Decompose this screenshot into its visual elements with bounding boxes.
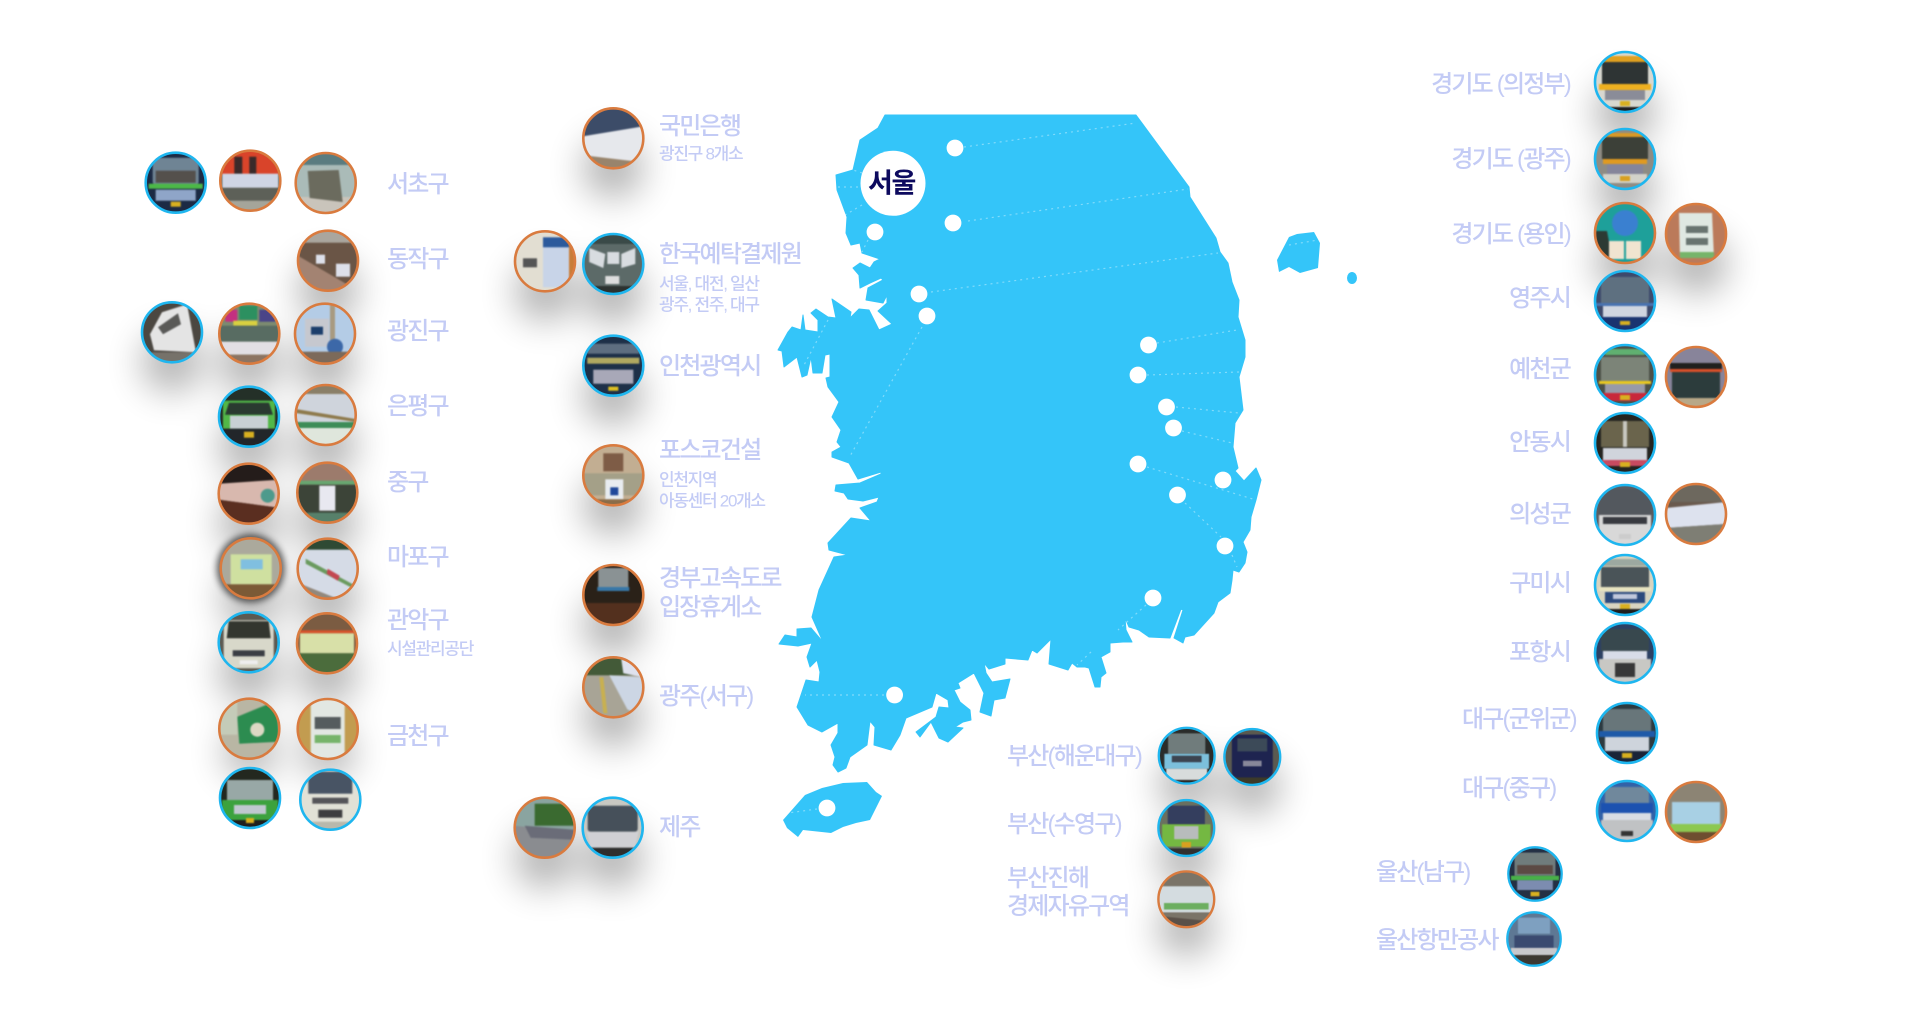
photo: 해운대구 navy truck: [1224, 729, 1280, 785]
photo: 의성 fence panels: [1666, 484, 1726, 544]
photo: white truck: [300, 770, 360, 830]
photo: 중구 shelter: [297, 463, 357, 523]
label: 서울, 대전, 일산: 서울, 대전, 일산: [659, 274, 760, 294]
label: 의성군: 의성군: [1509, 501, 1571, 528]
label: 동작구: 동작구: [387, 246, 449, 273]
label: 부산(수영구): 부산(수영구): [1007, 811, 1122, 838]
photo: green bus: [220, 768, 280, 828]
photo: 안동 bus: [1595, 413, 1655, 473]
island: Jeju: [783, 782, 882, 837]
label: 관악구: 관악구: [387, 607, 449, 634]
label: 중구: 중구: [387, 469, 428, 496]
label: 인천광역시: 인천광역시: [659, 353, 760, 380]
panel: Busan: [1007, 728, 1280, 927]
photo: 제주 roadside: [515, 798, 575, 858]
photo: 대구 중구 blue truck: [1597, 781, 1657, 841]
photo: 금천구 green wall: [219, 699, 279, 759]
photo: 구미 bus: [1595, 555, 1655, 615]
photo: 한국예탁결제원 bus: [583, 234, 643, 294]
photo: 마포구 banner: [298, 539, 358, 599]
photo: 서초구 cabinet: [296, 153, 356, 213]
photo: 포스코건설 display: [583, 445, 643, 505]
photo: 중구 night banner: [219, 464, 279, 524]
photo: 대구 중구 banner: [1666, 782, 1726, 842]
label: 금천구: 금천구: [387, 723, 449, 750]
label: 경기도 (의정부): 경기도 (의정부): [1431, 71, 1571, 98]
label: 울산항만공사: 울산항만공사: [1376, 927, 1499, 954]
label: 은평구: 은평구: [387, 393, 449, 420]
label: 부산진해: 부산진해: [1007, 865, 1088, 892]
label: 입장휴게소: 입장휴게소: [659, 594, 761, 621]
photo: 예천 red bus: [1595, 345, 1655, 405]
photo: 군위 blue bus: [1597, 703, 1657, 763]
Seoul marker: 서울: [868, 168, 915, 198]
photo: 은평구 fence banner: [296, 385, 356, 445]
photo: 광진구 white truck: [142, 302, 202, 362]
photo: 국민은행: [583, 108, 643, 168]
label: 인천지역: 인천지역: [659, 470, 716, 490]
panel: organisations and regions: [515, 108, 801, 858]
photo: 관악구 banner: [297, 613, 357, 673]
label: 광진구 8개소: 광진구 8개소: [659, 144, 743, 164]
photo: 수영구 green truck: [1158, 800, 1214, 856]
photo: 예천 bus shelter: [1666, 347, 1726, 407]
label: 경부고속도로: 경부고속도로: [659, 565, 781, 592]
photo: 의성 grey bus: [1595, 485, 1655, 545]
label: 광진구: 광진구: [387, 318, 449, 345]
island: Dokdo: [1347, 272, 1357, 284]
photo: 울산 남구 green bus: [1508, 847, 1562, 901]
map of South Korea: [778, 115, 1357, 837]
photo: 부산진해 banner: [1158, 871, 1214, 927]
photo: 한국예탁결제원 poster: [515, 231, 575, 291]
label: 대구(중구): 대구(중구): [1462, 775, 1556, 802]
label: 경기도 (광주): 경기도 (광주): [1451, 146, 1571, 173]
label: 아동센터 20개소: 아동센터 20개소: [659, 492, 765, 510]
photo: 포항 bus: [1595, 623, 1655, 683]
label: 제주: 제주: [659, 814, 700, 841]
label: 예천군: 예천군: [1509, 356, 1571, 383]
label: 대구(군위군): 대구(군위군): [1462, 706, 1577, 733]
photo: 인천광역시 bus: [583, 336, 643, 396]
panel: provinces and cities: [1376, 52, 1726, 966]
dotted leader lines: [788, 123, 1318, 813]
label: 경기도 (용인): 경기도 (용인): [1451, 221, 1571, 248]
photo: 의정부 yellow bus: [1595, 52, 1655, 112]
label: 구미시: 구미시: [1509, 570, 1570, 597]
panel: Seoul districts: [142, 151, 475, 830]
label: 영주시: 영주시: [1509, 285, 1570, 312]
photo: 용인 mascot: [1595, 203, 1655, 263]
photo: 해운대구 truck: [1159, 728, 1215, 784]
photo: 은평구 green bus: [219, 387, 279, 447]
photo: 영주 blue bus: [1595, 271, 1655, 331]
label: 경제자유구역: 경제자유구역: [1007, 893, 1129, 920]
photo: 관악구 white truck: [219, 612, 279, 672]
label: 안동시: 안동시: [1509, 429, 1570, 456]
photo: 경부고속도로 rest area: [583, 565, 643, 625]
Seoul marker: [860, 151, 926, 216]
island: Ulleungdo: [1277, 232, 1320, 273]
photo: 광주 orange bus: [1595, 129, 1655, 189]
label: 마포구: 마포구: [387, 544, 449, 571]
label: 시설관리공단: 시설관리공단: [387, 640, 475, 658]
mainland: [778, 115, 1261, 772]
photo: 울산항만공사 truck: [1507, 912, 1561, 966]
photo: 금천구 poster: [298, 699, 358, 759]
label: 부산(해운대구): 부산(해운대구): [1007, 743, 1142, 770]
label: 포항시: 포항시: [1509, 639, 1570, 666]
label: 광주(서구): 광주(서구): [659, 683, 753, 710]
photo: 광진구 market: [219, 304, 279, 364]
label: 한국예탁결제원: 한국예탁결제원: [659, 241, 801, 268]
label: 광주, 전주, 대구: 광주, 전주, 대구: [659, 296, 759, 314]
photo: 서초구 green bus: [146, 153, 206, 213]
photo: 광진구 sign on pole: [295, 304, 355, 364]
label: 국민은행: 국민은행: [659, 113, 740, 140]
photo: 용인 poster: [1666, 204, 1726, 264]
photo: 마포구 pictured panel: [221, 538, 281, 598]
label: 서초구: 서초구: [387, 171, 449, 198]
photo: 광주 서구 fence: [583, 657, 643, 717]
photo: 제주 bus: [583, 798, 643, 858]
photo: 동작구 street: [298, 231, 358, 291]
label: 포스코건설: 포스코건설: [659, 437, 761, 464]
location dots: [819, 140, 1233, 816]
label: 울산(남구): 울산(남구): [1376, 859, 1470, 886]
photo: 서초구 red shelter: [220, 151, 280, 211]
